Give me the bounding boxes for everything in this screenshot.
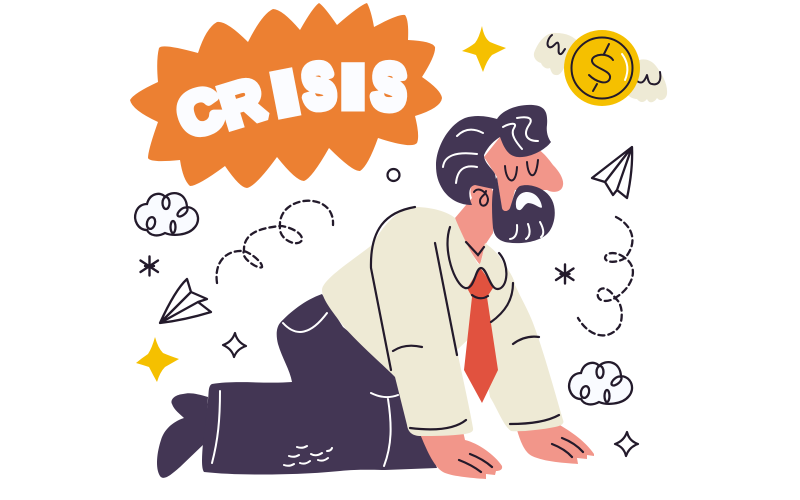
- dollar sign: [589, 44, 613, 91]
- icon: yellow sparkle bottom left: [136, 337, 179, 382]
- hand left: [420, 431, 502, 479]
- ear squiggle: [474, 190, 488, 206]
- right wing: [626, 59, 667, 102]
- left wing: [534, 33, 580, 75]
- icon: cloud left: [135, 193, 198, 235]
- shirt: [322, 207, 563, 436]
- title: CRISIS: I: [342, 55, 364, 120]
- neck and ear: [455, 182, 494, 265]
- coin highlight: [622, 54, 627, 80]
- hair and trouser highlights: [212, 117, 543, 466]
- icon: cloud right: [569, 362, 632, 404]
- thought bubble circle: [388, 169, 400, 181]
- icon: flying dollar coin: [534, 30, 667, 106]
- title: CRISIS: I: [268, 60, 302, 127]
- trousers: [202, 294, 437, 475]
- foot: [157, 393, 208, 478]
- shirt outlines: [371, 207, 583, 472]
- coin disc: [564, 30, 640, 106]
- speech burst with CRISIS title: [130, 3, 442, 188]
- tie: [464, 268, 498, 403]
- icon: outline sparkle left: [223, 333, 246, 357]
- dashed flight path right: [578, 217, 633, 335]
- face: [484, 137, 563, 212]
- beard: [492, 177, 555, 243]
- icon: asterisk left: [140, 256, 158, 276]
- icon: asterisk right: [556, 264, 574, 284]
- icon: outline sparkle right: [615, 432, 638, 456]
- hair: [436, 105, 551, 205]
- icon: paper plane right: [592, 147, 632, 198]
- hand right: [517, 424, 594, 464]
- dashed flight path left: [217, 201, 333, 283]
- title: CRISIS: [170, 51, 408, 150]
- character: kneeling businessman: [157, 105, 594, 479]
- icon: paper plane left: [160, 279, 211, 323]
- eyes: [505, 160, 538, 180]
- title: CRISIS: C: [170, 75, 231, 150]
- title: CRISIS: S: [300, 51, 338, 122]
- moustache highlight: [516, 192, 542, 210]
- wing feathers: [548, 35, 660, 84]
- icon: yellow sparkle top: [462, 26, 506, 72]
- orange burst: [130, 3, 442, 188]
- title: CRISIS: R: [213, 66, 272, 141]
- coin rim: [572, 38, 632, 98]
- title: CRISIS: S: [371, 51, 408, 122]
